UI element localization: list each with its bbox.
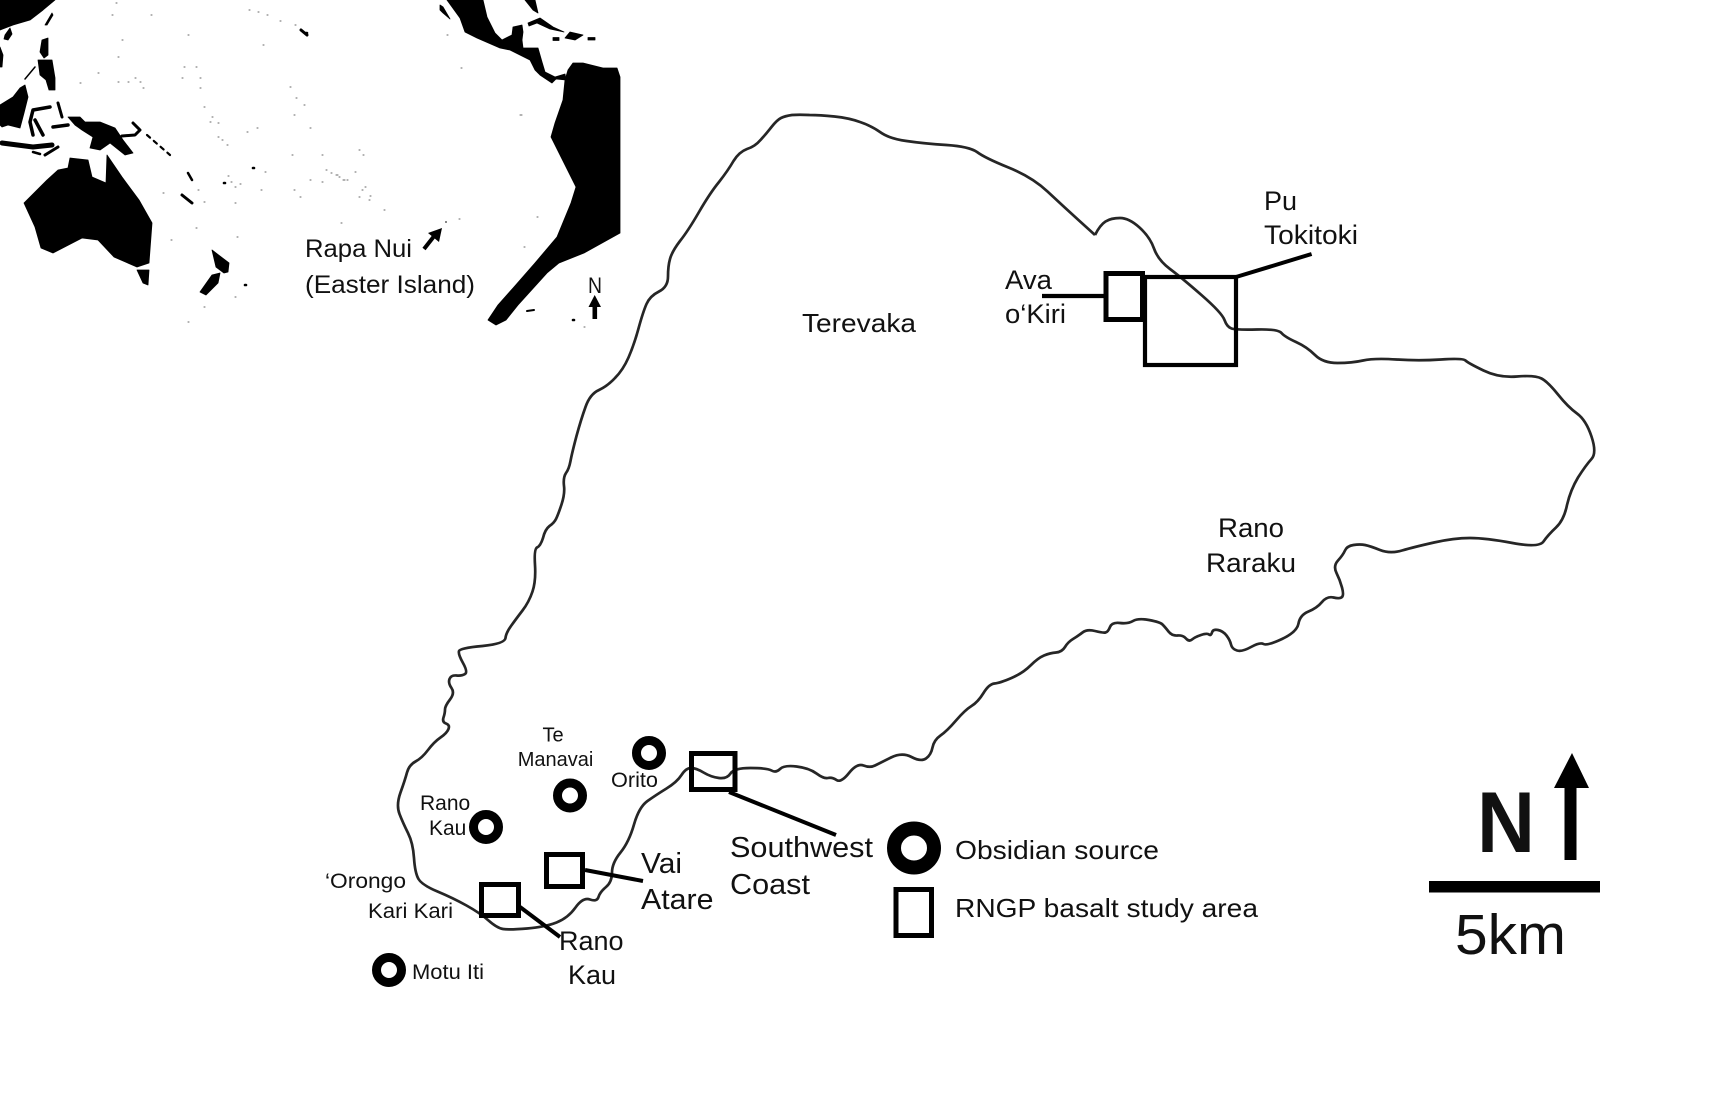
inset north label: N xyxy=(588,273,602,298)
land: Puerto Rico xyxy=(588,38,595,40)
land: Borneo xyxy=(0,85,28,128)
obsidian source: Rano Kau xyxy=(474,814,498,840)
arrow: to Rapa Nui xyxy=(424,228,442,249)
legend text: study area: RNGP basalt study area xyxy=(955,893,1259,923)
obsidian source: Orito xyxy=(636,740,662,766)
land: New Zealand south xyxy=(200,273,220,295)
inset label: Rapa Nui: Rapa Nui xyxy=(305,235,412,263)
scale line xyxy=(1429,881,1600,892)
label: Motu Iti: Motu Iti xyxy=(412,961,484,984)
study area: Rano Kau xyxy=(482,884,560,937)
label: Ava: Ava xyxy=(1005,265,1053,295)
study area: Pu Tokitoki xyxy=(1145,254,1312,365)
label: Southwest: Southwest xyxy=(730,832,873,864)
obsidian source: Te Manavai xyxy=(558,783,582,808)
label: Rano Kau study area: Rano xyxy=(559,926,624,956)
land: Jamaica xyxy=(553,38,559,40)
legend symbol: study area xyxy=(896,890,932,936)
island coastline xyxy=(398,115,1594,929)
larger Pacific islets xyxy=(224,33,574,320)
inset label: Easter Island: (Easter Island) xyxy=(305,271,475,299)
land: North and Central America xyxy=(447,0,566,83)
land: Tasmania xyxy=(137,270,149,285)
north letter: N xyxy=(1477,775,1535,871)
land: Florida xyxy=(525,0,538,13)
land: Cuba xyxy=(528,18,564,32)
label: Orongo: ‘Orongo xyxy=(325,870,406,893)
study area: Southwest Coast xyxy=(692,754,836,835)
scale bar xyxy=(1429,881,1600,967)
scale text: 5km xyxy=(1455,903,1566,967)
label: Pu: Pu xyxy=(1264,186,1297,216)
label: Kari Kari: Kari Kari xyxy=(368,900,453,923)
label: Te Manavai: Te xyxy=(542,724,564,746)
land: South America xyxy=(488,63,620,325)
Rapa Nui location dot xyxy=(445,221,447,223)
label: Tokitoki: Tokitoki xyxy=(1264,220,1358,250)
label: o'Kiri: o‘Kiri xyxy=(1005,299,1066,329)
label: Rano Kau source: Rano xyxy=(420,792,470,815)
label: Te Manavai: Manavai xyxy=(518,749,593,771)
land: Taiwan xyxy=(45,13,53,25)
label: Atare: Atare xyxy=(641,884,714,916)
land: Australia xyxy=(24,155,152,267)
label: Coast: Coast xyxy=(730,869,810,901)
inset map: Pacific Ocean xyxy=(0,0,620,327)
study area: Vai Atare xyxy=(546,854,643,886)
place labels xyxy=(325,186,1358,990)
legend text: obsidian source: Obsidian source xyxy=(955,835,1159,865)
label: Rano (Rano Raraku): Rano xyxy=(1218,513,1284,543)
land: Indochina sliver xyxy=(0,47,3,67)
island chains xyxy=(2,30,534,311)
land: Baja California xyxy=(440,5,450,19)
label: Orito: Orito xyxy=(611,769,658,792)
obsidian source: Motu Iti xyxy=(376,958,402,982)
label: Raraku: Raraku xyxy=(1206,548,1296,578)
landmasses xyxy=(0,0,620,325)
land: Visayas and Mindanao xyxy=(38,60,55,90)
study area: Ava o'Kiri xyxy=(1042,274,1142,320)
land: Luzon xyxy=(40,38,48,58)
label: Vai: Vai xyxy=(641,848,682,880)
land: East Asia xyxy=(0,0,55,30)
inset north arrow xyxy=(588,295,601,319)
scattered Pacific islands xyxy=(80,3,585,327)
legend xyxy=(894,828,1259,936)
label: Terevaka: Terevaka xyxy=(802,308,917,338)
north indicator xyxy=(1477,753,1589,871)
land: New Zealand north xyxy=(212,250,229,273)
land: New Guinea xyxy=(68,117,133,155)
land: Hispaniola xyxy=(565,32,583,40)
land: Hainan xyxy=(4,28,12,40)
label: Rano Kau source: Kau xyxy=(429,817,466,840)
legend symbol: obsidian source xyxy=(894,828,934,868)
north arrow xyxy=(1554,753,1589,860)
label: Rano Kau study area: Kau xyxy=(568,960,616,990)
